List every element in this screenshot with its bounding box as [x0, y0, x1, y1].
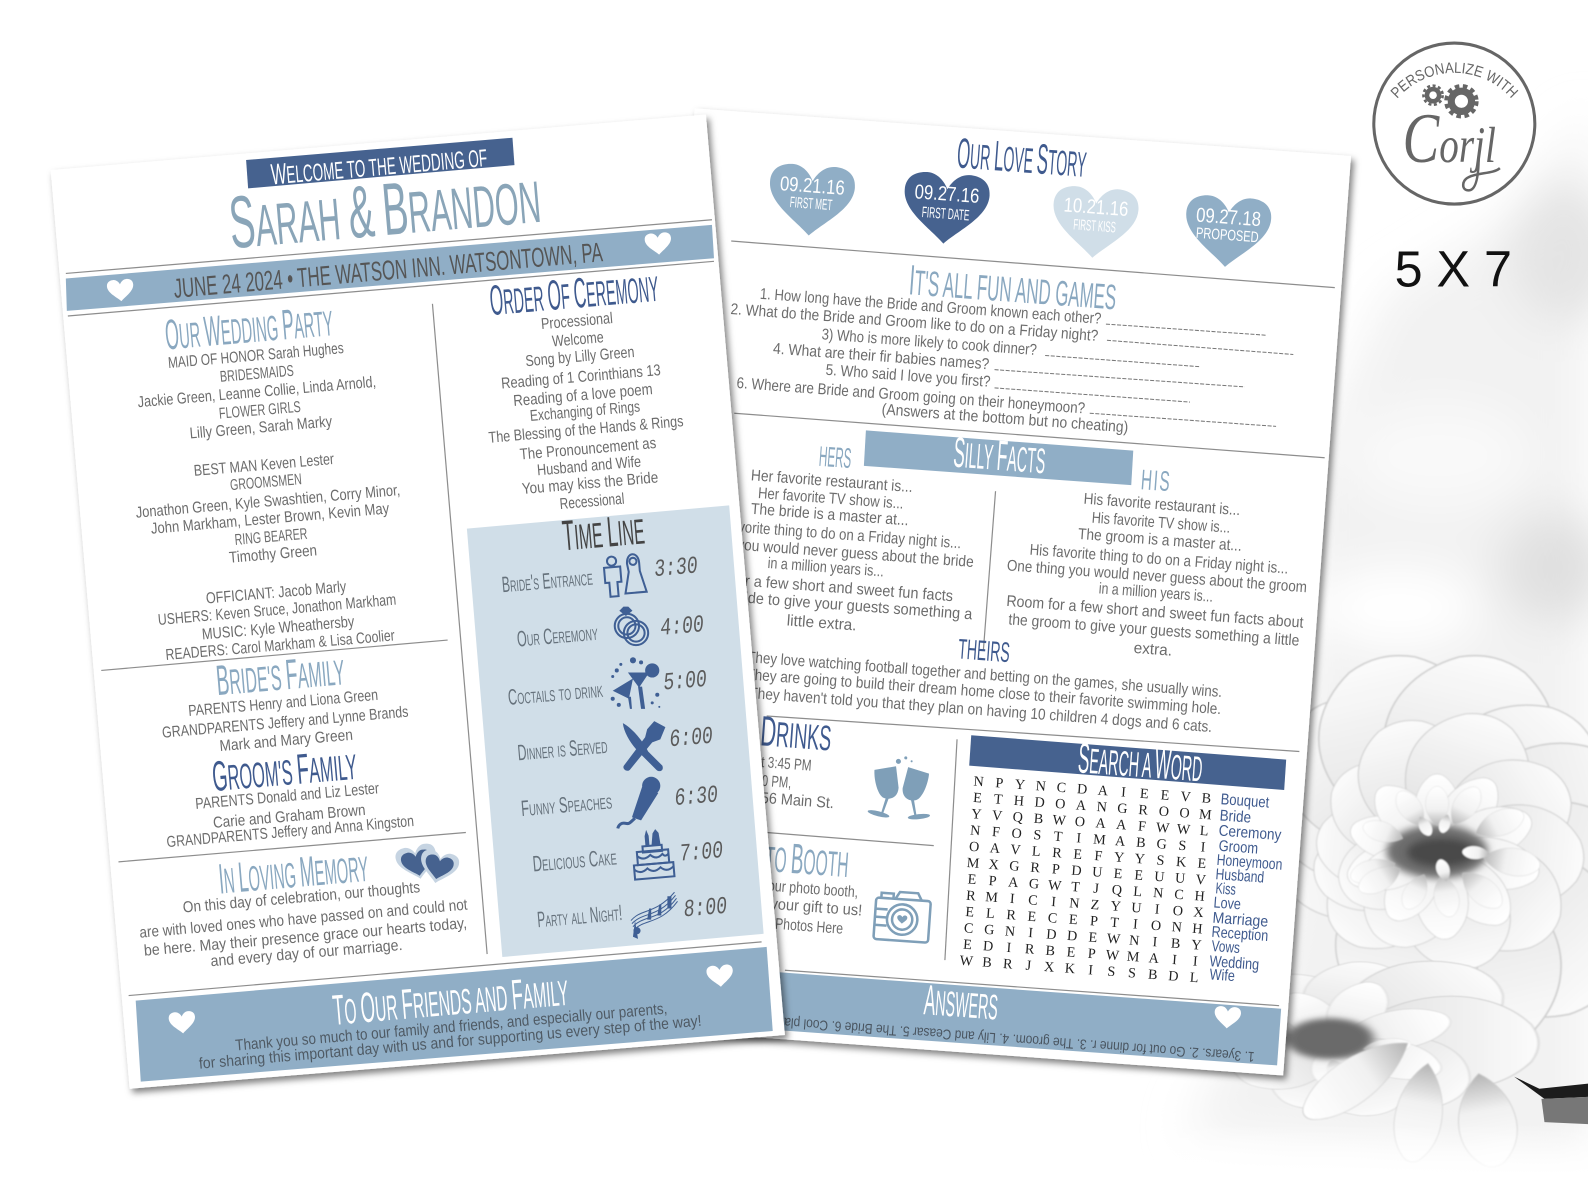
- date and venue: JUNE 24 2024 • THE WATSON INN. WATSONTOWN, PA: [172, 236, 604, 304]
- couple names: SARAH & BRANDON: [226, 155, 544, 264]
- his text: extra.: [1133, 640, 1173, 660]
- names: PARENTS Henry and Liona Green: [188, 687, 379, 720]
- icon: rings: [615, 608, 648, 645]
- hers text: The bride is a master at...: [750, 501, 909, 529]
- names: USHERS: Keven Sruce, Jonathon Markham: [157, 592, 397, 629]
- theirs label: THEIRS: [957, 633, 1011, 669]
- icon: heart left: [106, 278, 135, 302]
- names: [166, 780, 415, 851]
- steps: Song by Lilly Green: [525, 344, 635, 370]
- heart: first kiss: FIRST KISS: [1073, 216, 1116, 236]
- letter grid: EPAGWTJQLNCH: [967, 871, 1205, 905]
- search a word section: [959, 734, 1286, 986]
- word list: Groom: [1218, 838, 1259, 858]
- details: [712, 751, 834, 812]
- names: BRIDESMAIDS: [219, 363, 294, 386]
- hers text: Room for a few short and sweet fun facts: [690, 569, 954, 605]
- row: dinner: Dinner is Served: [516, 733, 608, 765]
- letter grid: OAVLREFYYSKE: [968, 839, 1207, 872]
- word list: Bouquet: [1220, 791, 1270, 812]
- paper: [51, 114, 785, 1089]
- letter grid: MXGRPDUEEUUV: [966, 855, 1207, 889]
- names: Timothy Green: [228, 542, 318, 567]
- questions: 6. Where are Bride and Groom going on their honeymoon?: [736, 375, 1086, 417]
- games section: [730, 256, 1293, 436]
- groom's family: [166, 741, 415, 851]
- icon: knife and fork: [623, 721, 665, 771]
- order of ceremony: [488, 263, 684, 513]
- letter grid: ELRECEPTIONH: [965, 904, 1203, 937]
- row: bride's entrance: Bride's Entrance: [501, 565, 594, 597]
- steps: Recessional: [559, 491, 625, 513]
- his text: the groom to give your guests something a little: [1008, 611, 1300, 650]
- theirs text: They love watching football together and betting on the games, she usually wins.: [747, 649, 1223, 701]
- band: [704, 967, 1281, 1065]
- icon: heart: [1214, 1006, 1241, 1029]
- heading: PHOTO BOOTH: [728, 830, 850, 887]
- silly facts section: HERS: [818, 441, 853, 475]
- his text: His favorite restaurant is...: [1083, 491, 1241, 519]
- questions: 3) Who is more likely to cook dinner?: [821, 326, 1038, 359]
- heading: TO OUR FRIENDS AND FAMILY: [331, 967, 570, 1035]
- questions: (Answers at the bottom but no cheating): [881, 401, 1129, 436]
- message line 2: for sharing this important day with us and for supporting us every step of the way!: [198, 1013, 702, 1073]
- steps: [488, 310, 684, 513]
- questions: [730, 286, 1293, 436]
- names: OFFICIANT: Jacob Marly: [205, 579, 347, 608]
- petals: bottom: [1292, 1025, 1524, 1172]
- page: front: [51, 114, 785, 1089]
- heading: GROOM'S FAMILY: [210, 741, 359, 801]
- icon: music staff: [631, 892, 678, 939]
- steps: Exchanging of Rings: [529, 399, 641, 425]
- heart: first met: FIRST MET: [789, 194, 833, 214]
- details: Get Photos Here: [751, 914, 844, 938]
- names: READERS: Carol Markham & Lisa Coolier: [165, 627, 395, 664]
- hers text: Her favorite restaurant is...: [750, 467, 913, 496]
- his text: in a million years is...: [1098, 580, 1214, 606]
- word list: Kiss: [1215, 880, 1237, 899]
- row: our ceremony: [516, 608, 705, 652]
- welcome banner: [246, 138, 514, 188]
- his text: Room for a few short and sweet fun facts about: [1006, 593, 1305, 632]
- panel background: [467, 505, 764, 957]
- names: GRANDPARENTS Jeffery and Lynne Brands: [161, 704, 409, 742]
- hers text: Her favorite TV show is...: [757, 485, 904, 513]
- row: dinner: [516, 721, 714, 771]
- row: bride's entrance: 3:30: [653, 553, 699, 584]
- letter grid: YVQBWOAAFWWL: [971, 806, 1209, 840]
- page: back: [627, 108, 1351, 1076]
- band: [136, 947, 773, 1082]
- silly facts section: [673, 429, 1308, 736]
- banner: [864, 430, 1133, 485]
- word list: Marriage: [1212, 910, 1269, 931]
- message: and every day of our marriage.: [210, 937, 403, 970]
- message: Thank you so much to our family and friends, and especially our parents,: [235, 1001, 668, 1055]
- questions: 5. Who said I love you first?: [825, 362, 991, 391]
- friends and family banner: [136, 947, 773, 1082]
- hers text: [673, 467, 975, 634]
- icon: two hearts: [394, 842, 461, 887]
- heart: first met: [766, 162, 856, 239]
- heading: TIME LINE: [561, 506, 646, 560]
- hers text: the bride to give your guests something a: [707, 587, 973, 623]
- names: MAID OF HONOR Sarah Hughes: [167, 340, 344, 372]
- names: [135, 340, 401, 664]
- banner title: SEARCH A WORD: [1076, 734, 1204, 791]
- names: John Markham, Lester Brown, Kevin May: [150, 500, 390, 538]
- heart: proposed: 09.27.18: [1195, 205, 1262, 231]
- names: Lilly Green, Sarah Marky: [189, 413, 333, 443]
- word list: Reception: [1211, 924, 1269, 945]
- theirs text: They haven't told you that they plan on having 10 children 4 dogs and 6 cats.: [749, 685, 1213, 736]
- hers text: One thing you would never guess about the bride: [673, 532, 975, 571]
- names: PARENTS Donald and Liz Lester: [195, 780, 380, 813]
- his text: The groom is a master at...: [1077, 526, 1242, 555]
- row: our ceremony: 4:00: [659, 612, 705, 643]
- questions: 2. What do the Bride and Groom like to do on a Friday night?: [730, 301, 1099, 345]
- details: [746, 876, 863, 938]
- heading: OUR WEDDING PARTY: [163, 297, 335, 359]
- banner title: SILLY FACTS: [952, 429, 1047, 483]
- message: be here. May their presence grace our hearts today,: [143, 915, 468, 960]
- letter grid: NFOSTIMABGSI: [970, 822, 1206, 856]
- free drinks section: [703, 703, 934, 822]
- message: [139, 879, 469, 970]
- letter grid: NPYNCDAIEEVB: [973, 774, 1212, 807]
- row: cake: Delicious Cake: [532, 844, 618, 877]
- logo: personalize with Corjl: Corjl: [1403, 100, 1496, 178]
- row: party: [536, 892, 728, 939]
- answers banner: [704, 967, 1281, 1065]
- details: as your gift to us!: [750, 894, 863, 920]
- letter grid: ETHDOANGROOM: [973, 790, 1213, 823]
- row: cake: 7:00: [679, 838, 724, 869]
- details: Until 4:00 PM,: [720, 770, 792, 792]
- word list: [1209, 791, 1283, 985]
- header: [66, 138, 714, 316]
- letter grid: RMICINZYUIOX: [966, 888, 1204, 921]
- heart: proposed: [1183, 194, 1273, 270]
- flower: lower bloom: [1161, 942, 1539, 1124]
- names: GRANDPARENTS Jeffery and Anna Kingston: [166, 813, 415, 851]
- names: RING BEARER: [234, 526, 308, 549]
- questions: 1. How long have the Bride and Groom known each other?: [759, 286, 1102, 328]
- banner: [969, 735, 1286, 790]
- row: cake: [532, 828, 724, 880]
- letter grid: [959, 774, 1213, 986]
- icon: heart left: [168, 1011, 196, 1035]
- word list: Honeymoon: [1216, 852, 1283, 874]
- heading: FREE DRINKS: [703, 703, 833, 760]
- letter grid: WBRJXKISSBDL: [959, 953, 1199, 986]
- theirs text: They are going to build their dream home close to their favorite swimming hole.: [746, 666, 1222, 718]
- icon: wedding cake: [631, 828, 674, 880]
- icon: cocktail glasses: [611, 657, 660, 709]
- icon: bride and groom: [603, 553, 647, 597]
- heading: ORDER OF CEREMONY: [488, 263, 660, 325]
- steps: The Pronouncement as: [519, 435, 657, 464]
- details: Try our photo booth,: [746, 876, 859, 901]
- heart: proposed: PROPOSED: [1195, 225, 1259, 246]
- row: speeches: Funny Speaches: [520, 788, 613, 821]
- logo: personalize with Corjl: [1372, 42, 1536, 206]
- upside-down answers: 1. 3years. 2. Go out for dinne r. 3. The groom. 4. Lily and Ceasar 5. The Bride 6. Cool place: [771, 1013, 1255, 1064]
- wedding party: [135, 297, 401, 664]
- heart: first date: [901, 170, 991, 247]
- names: FLOWER GIRLS: [218, 399, 301, 423]
- games section: IT'S ALL FUN AND GAMES: [907, 256, 1118, 319]
- word list: Ceremony: [1218, 823, 1282, 844]
- in loving memory: [139, 842, 469, 970]
- row: dinner: 6:00: [668, 724, 714, 754]
- icon: heart right: [644, 232, 672, 256]
- names: Jackie Green, Leanne Collie, Linda Arnold,: [137, 374, 377, 411]
- answers banner: ANSWERS: [922, 976, 1000, 1029]
- logo: personalize with Corjl: PERSONALIZE WITH: [1390, 62, 1518, 98]
- icon: champagne glasses: [867, 754, 934, 822]
- names: MUSIC: Kyle Wheathersby: [201, 613, 355, 643]
- heart: first kiss: [1050, 185, 1140, 261]
- bride's family: [161, 646, 409, 755]
- word list: Love: [1213, 894, 1242, 913]
- steps: You may kiss the Bride: [521, 469, 659, 498]
- love story section: [766, 130, 1273, 270]
- word list: Bride: [1219, 807, 1252, 827]
- row: speeches: 6:30: [673, 782, 719, 813]
- steps: Reading of a love poem: [513, 381, 653, 410]
- his label: HIS: [1140, 464, 1173, 498]
- word list: Vows: [1211, 938, 1241, 957]
- row: cocktails: [507, 657, 708, 710]
- row: party: 8:00: [683, 894, 728, 924]
- timeline panel: [467, 505, 764, 957]
- names: Jonathon Green, Kyle Swashtien, Corry Minor,: [135, 482, 401, 522]
- his text: [1006, 491, 1308, 660]
- row: party: Party all Night!: [536, 900, 623, 932]
- photo booth section: [728, 830, 931, 943]
- names: Mark and Mary Green: [219, 727, 354, 755]
- icon: heart right: [706, 964, 734, 988]
- welcome text: WELCOME TO THE WEDDING OF: [270, 140, 488, 191]
- date band: [66, 225, 714, 311]
- flower: large bloom: [1249, 638, 1588, 1072]
- size label: 5 X 7: [1395, 241, 1512, 298]
- names: [161, 687, 409, 755]
- questions: 4. What are their fir babies names?: [772, 340, 990, 373]
- row: cocktails: Coctails to drink: [507, 677, 604, 710]
- theirs text: [746, 649, 1223, 736]
- word list: Husband: [1215, 866, 1265, 887]
- paper: [627, 108, 1351, 1076]
- steps: Welcome: [551, 329, 605, 351]
- details: Starts at 3:45 PM: [720, 751, 812, 775]
- letter grid: EDIRBEPWMAII: [963, 937, 1198, 970]
- steps: The Blessing of the Hands & Rings: [488, 413, 684, 447]
- heart: first date: 09.27.16: [914, 181, 980, 208]
- heading: BRIDE'S FAMILY: [214, 646, 346, 705]
- names: BEST MAN Keven Lester: [193, 451, 335, 480]
- heart: first met: 09.21.16: [779, 173, 845, 200]
- word list: Wedding: [1209, 953, 1260, 974]
- heading: OUR LOVE STORY: [955, 130, 1088, 187]
- steps: Husband and Wife: [536, 454, 642, 479]
- details: at 123456 Main St.: [712, 786, 834, 812]
- row: cocktails: 5:00: [662, 667, 708, 697]
- steps: Processional: [540, 310, 613, 333]
- heart: first kiss: 10.21.16: [1063, 194, 1129, 221]
- steps: Reading of 1 Corinthians 13: [500, 362, 662, 393]
- names: GROOMSMEN: [229, 471, 303, 494]
- row: speeches: [520, 777, 719, 828]
- hers text: little extra.: [786, 612, 857, 634]
- hers text: in a million years is...: [767, 555, 884, 580]
- icon: camera: [873, 890, 931, 943]
- word list: Wife: [1209, 966, 1236, 985]
- heart: first date: FIRST DATE: [921, 204, 970, 224]
- names: Carie and Graham Brown: [212, 802, 366, 832]
- message: are with loved ones who have passed on and could not: [139, 897, 469, 942]
- icon: microphone: [618, 777, 660, 828]
- letter grid: CGNIDDEWNIBY: [963, 920, 1202, 954]
- hers text: Her favorite thing to do on a Friday night is...: [702, 516, 962, 552]
- message: On this day of celebration, our thoughts: [182, 879, 421, 917]
- heading: IN LOVING MEMORY: [217, 843, 370, 904]
- his text: His favorite thing to do on a Friday night is...: [1029, 542, 1289, 578]
- row: our ceremony: Our Ceremony: [516, 620, 599, 652]
- his text: One thing you would never guess about the groom: [1006, 557, 1308, 596]
- his text: His favorite TV show is...: [1091, 510, 1231, 537]
